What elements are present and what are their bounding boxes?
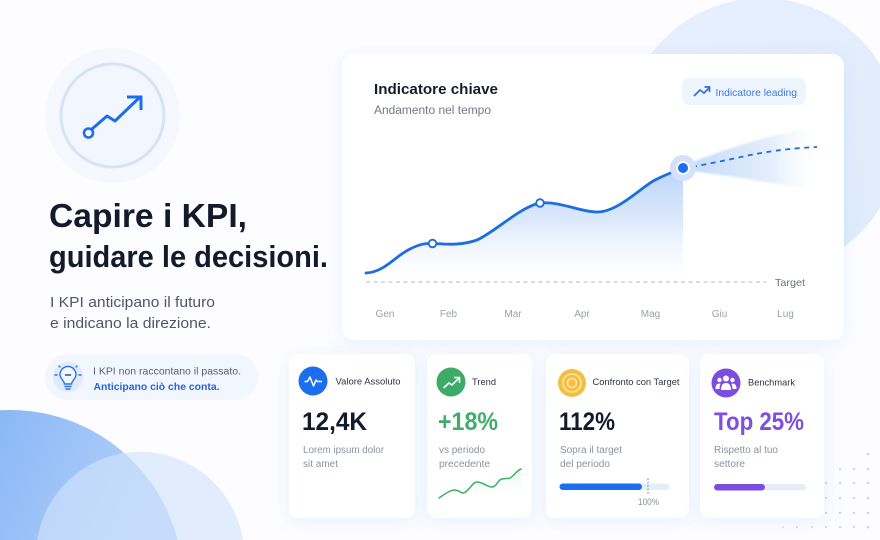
decorative circles bottom left — [0, 410, 243, 540]
callout — [45, 354, 258, 400]
data point Mag — [670, 155, 696, 181]
line series — [366, 168, 683, 273]
callout: Anticipano ciò che conta. — [94, 381, 220, 393]
badge: leading indicator — [682, 78, 806, 105]
forecast dashed line — [692, 147, 817, 167]
subtitle text: I KPI anticipano il futuro — [50, 294, 215, 311]
decorative circle top right — [624, 0, 880, 274]
panel: trend: precedente — [439, 459, 490, 470]
month axis labels: Mar — [504, 309, 522, 320]
callout: I KPI non raccontano il passato. — [93, 366, 241, 378]
month axis labels: Giu — [712, 309, 727, 320]
panel: benchmark: Rispetto al tuo — [714, 445, 778, 456]
area under line — [366, 168, 683, 282]
month axis labels — [376, 309, 794, 320]
panel: valore assoluto — [289, 354, 415, 518]
panel: confronto con target: del periodo — [560, 459, 610, 470]
title: guidare le decisioni. — [49, 239, 328, 274]
panel: valore assoluto: Lorem ipsum dolor — [303, 445, 385, 456]
chart heading: Indicatore chiave — [374, 81, 498, 98]
icon: light bulb — [55, 366, 81, 389]
title — [49, 197, 328, 274]
panel: confronto con target: Sopra il target — [560, 445, 622, 456]
badge: leading indicator: Indicatore leading — [716, 87, 797, 99]
icon: people — [712, 368, 740, 398]
panel: trend: Trend — [472, 377, 496, 388]
icon: target — [558, 369, 586, 397]
panel: benchmark: Top 25% — [714, 408, 804, 436]
panel: trend: +18% — [438, 408, 498, 436]
progress bar: 100% — [638, 497, 659, 507]
panel: benchmark: settore — [714, 459, 745, 470]
month axis labels: Lug — [777, 309, 794, 320]
month axis labels: Feb — [440, 309, 458, 320]
panel: trend: vs periodo — [439, 445, 485, 456]
icon: pulse — [298, 366, 328, 396]
title: Capire i KPI, — [49, 197, 247, 234]
chart subheading: Andamento nel tempo — [374, 105, 491, 117]
panel: confronto con target: Confronto con Target — [592, 377, 680, 388]
panel: main chart — [342, 54, 844, 340]
subtitle text — [50, 294, 215, 332]
icon: trend up — [436, 368, 466, 396]
forecast cone — [683, 126, 820, 192]
sparkline — [439, 469, 521, 499]
progress bar — [714, 484, 806, 490]
panel: confronto con target: 112% — [559, 408, 615, 436]
month axis labels: Mag — [641, 309, 660, 320]
panel: benchmark: Benchmark — [748, 378, 795, 388]
progress bar — [560, 478, 670, 507]
target line: Target — [775, 277, 805, 289]
panel: valore assoluto: 12,4K — [302, 408, 367, 436]
panel: valore assoluto: sit amet — [303, 459, 338, 470]
dot grid — [782, 453, 869, 528]
month axis labels: Apr — [574, 309, 590, 320]
data point Mar — [536, 199, 544, 207]
panel: trend — [427, 354, 532, 518]
panel: valore assoluto: Valore Assoluto — [336, 376, 400, 388]
subtitle text: e indicano la direzione. — [50, 315, 211, 332]
month axis labels: Gen — [376, 309, 394, 320]
panel: confronto con target — [546, 354, 689, 518]
data point Feb — [429, 240, 436, 247]
panel: benchmark — [700, 354, 824, 518]
icon: trend arrow in circle — [45, 48, 180, 183]
